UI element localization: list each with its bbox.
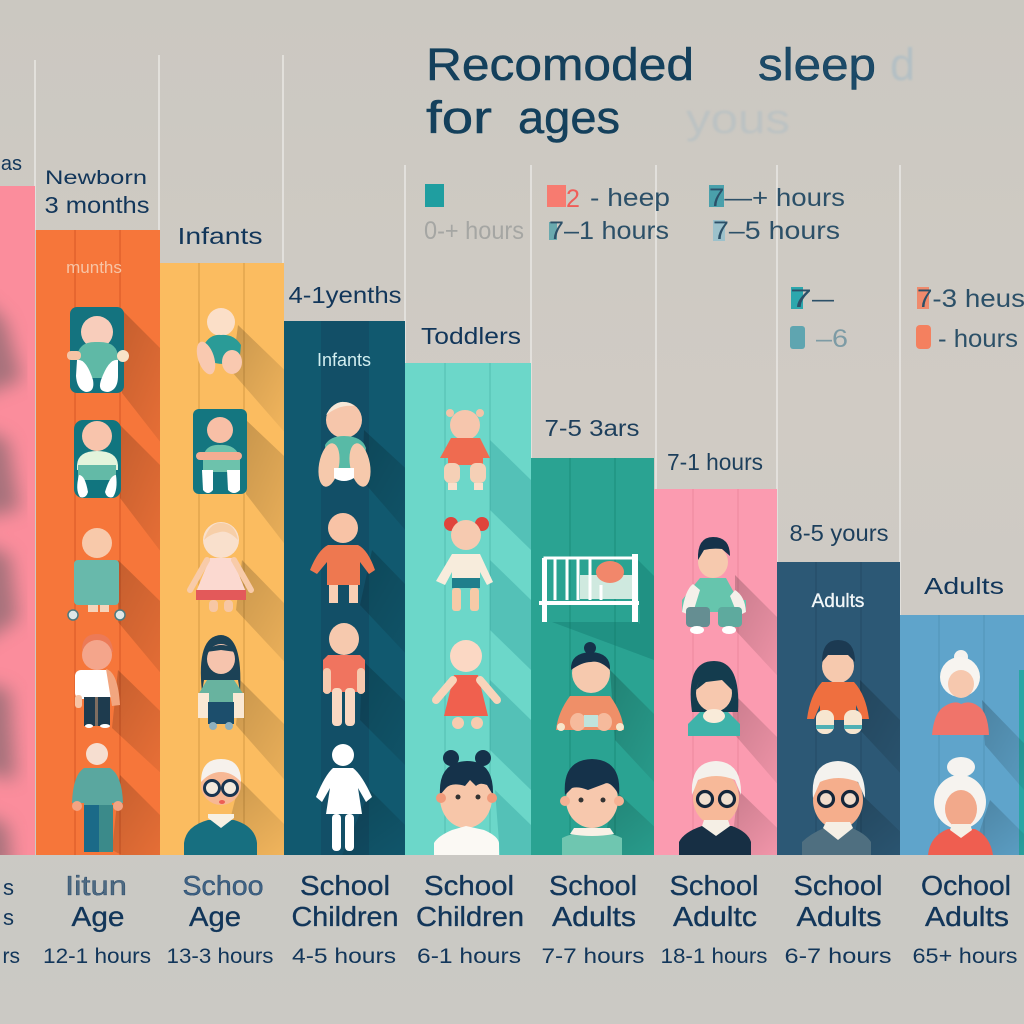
bar caption: Infants: Infants bbox=[317, 350, 371, 370]
label column 4 bbox=[416, 870, 524, 968]
figure: child red shirt bbox=[323, 623, 405, 760]
figure: sitting boy bbox=[682, 537, 777, 675]
label column 0: s bbox=[3, 875, 14, 900]
label column 1: Age bbox=[72, 901, 124, 932]
label column 2: 13-3 hours bbox=[166, 945, 274, 968]
label column 7 bbox=[784, 870, 892, 968]
legend item: 7-1 hours: 7–1 hours bbox=[549, 217, 669, 245]
figure: baby 1 bbox=[196, 308, 284, 431]
title: sleep bbox=[758, 39, 876, 90]
label column 1: 12-1 hours bbox=[43, 945, 151, 968]
label column 6: School bbox=[670, 870, 758, 901]
legend item: 12 sleep: - heep bbox=[590, 184, 670, 212]
icon: crib with baby bbox=[539, 554, 654, 660]
legend bbox=[424, 184, 1024, 353]
legend item: hours: - hours bbox=[938, 325, 1018, 353]
label: 8-5 years: 8-5 yours bbox=[790, 520, 888, 546]
label: 4-1 years: 4-1yenths bbox=[288, 282, 402, 308]
figure: child with white shirt bbox=[75, 634, 160, 772]
bar caption: months: munths bbox=[66, 258, 122, 277]
label column 8: Adults bbox=[925, 901, 1009, 932]
label column 4: School bbox=[424, 870, 514, 901]
figure: baby sitting bbox=[318, 402, 405, 527]
figure: toddler with red bows bbox=[436, 517, 493, 611]
label column 4: Children bbox=[416, 901, 524, 932]
label column 7: 6-7 hours bbox=[784, 945, 892, 968]
label column 7: Adults bbox=[796, 901, 882, 932]
figure: toddler orange bbox=[310, 513, 405, 649]
panel: partial pink bar bbox=[0, 153, 35, 870]
label: 7-hours: 7-1 hours bbox=[667, 449, 763, 475]
label column 1 bbox=[43, 870, 151, 968]
figure: girl teal bbox=[688, 661, 777, 783]
label column 5: 7-7 hours bbox=[542, 945, 644, 968]
figure: toddler red shirt bbox=[440, 409, 490, 490]
figure: elderly man with glasses bbox=[802, 761, 900, 855]
title: ages bbox=[518, 92, 620, 143]
panel: toddlers aqua bar bbox=[405, 363, 531, 855]
figure: grandmother 1 bbox=[932, 650, 1024, 790]
figure: seated child orange bbox=[807, 640, 900, 770]
legend item: 7+ hours: 7—+ hours bbox=[709, 184, 845, 212]
label column 6 bbox=[660, 870, 768, 968]
title: yous bbox=[686, 95, 790, 142]
label column 4: 6-1 hours bbox=[417, 945, 521, 968]
figure: toddler orange bbox=[556, 642, 654, 782]
label column 2: Schoo bbox=[182, 870, 264, 901]
figure: baby in crib 1 bbox=[67, 307, 160, 442]
legend item: -6: –6 bbox=[816, 325, 848, 353]
panel: newborn orange bar bbox=[36, 230, 160, 855]
panel: pink bar bbox=[654, 489, 777, 855]
label column 3: Children bbox=[292, 901, 398, 932]
panel: green bar bbox=[531, 458, 654, 855]
legend item: 0+ hours: 0-+ hours bbox=[424, 217, 524, 245]
label column 5: Adults bbox=[552, 901, 636, 932]
figure: white pictogram person bbox=[316, 744, 405, 855]
legend item: 12 sleep bbox=[547, 184, 670, 213]
figure: boy bbox=[560, 759, 654, 855]
label: Newborn 3 months bbox=[44, 167, 150, 218]
panel: infants yellow bar bbox=[160, 263, 284, 855]
figure: girl with dark hair bbox=[198, 635, 284, 779]
title: for bbox=[426, 92, 492, 143]
title bbox=[426, 39, 915, 143]
figure: baby in crib bbox=[193, 409, 284, 543]
labels above bars bbox=[44, 167, 1004, 599]
title: Recomoded bbox=[426, 39, 694, 90]
panel: dark teal bar bbox=[284, 321, 405, 855]
label column 3: School bbox=[300, 870, 390, 901]
figure: baby in crib 2 bbox=[74, 420, 160, 550]
label column 2: Age bbox=[189, 901, 241, 932]
figure: elderly man with glasses bbox=[679, 761, 777, 855]
label column 3 bbox=[292, 870, 398, 968]
label column 5 bbox=[542, 870, 644, 968]
legend item: 7-3 hours: 7-3 heus bbox=[917, 285, 1024, 313]
figure: adult in teal bbox=[72, 743, 160, 855]
legend item: teal swatch bbox=[425, 184, 444, 207]
panel: blue bar bbox=[900, 615, 1024, 860]
panel: navy bar bbox=[777, 562, 900, 855]
label: Newborn 3 months: Newborn bbox=[45, 167, 147, 189]
bar caption: Adults: Adults bbox=[812, 591, 864, 612]
label column 0 bbox=[2, 875, 20, 968]
legend item: 7-: 7– bbox=[790, 285, 834, 313]
figure: toddler red dress bbox=[436, 640, 497, 729]
label column 0: rs bbox=[2, 945, 20, 968]
label column 8 bbox=[912, 870, 1018, 968]
label column 6: 18-1 hours bbox=[660, 945, 768, 968]
label column 6: Adultc bbox=[673, 901, 757, 932]
label: Adults: Adults bbox=[924, 573, 1004, 599]
label: Infants: Infants bbox=[178, 223, 262, 249]
label column 7: School bbox=[794, 870, 882, 901]
legend item: -6 bbox=[790, 325, 848, 353]
label column 0: s bbox=[3, 905, 14, 930]
legend item: 12 sleep: 2 bbox=[566, 185, 580, 213]
label column 8: 65+ hours bbox=[912, 945, 1018, 968]
label: 7-5 years: 7-5 3ars bbox=[544, 415, 640, 441]
legend item: 7-5 hours: 7–5 hours bbox=[713, 217, 840, 245]
label: months: as bbox=[1, 153, 22, 175]
figure: grandmother 2 bbox=[928, 757, 1024, 860]
column divider lines bbox=[35, 55, 900, 615]
label column 1: Iitun bbox=[65, 870, 127, 901]
title: d bbox=[890, 39, 915, 90]
bottom labels bbox=[2, 870, 1018, 968]
figure: elderly man with glasses bbox=[184, 759, 284, 855]
label column 8: Ochool bbox=[921, 870, 1011, 901]
figure: blonde toddler bbox=[187, 522, 284, 661]
label: Newborn 3 months: 3 months bbox=[44, 192, 150, 218]
legend item: 7- bbox=[790, 285, 834, 313]
label: Toddlers: Toddlers bbox=[421, 323, 521, 349]
figure: girl with buns bbox=[434, 750, 499, 855]
label column 5: School bbox=[549, 870, 637, 901]
figure: toddler with wheels bbox=[67, 528, 160, 672]
label column 2 bbox=[166, 870, 274, 968]
label column 3: 4-5 hours bbox=[292, 945, 396, 968]
